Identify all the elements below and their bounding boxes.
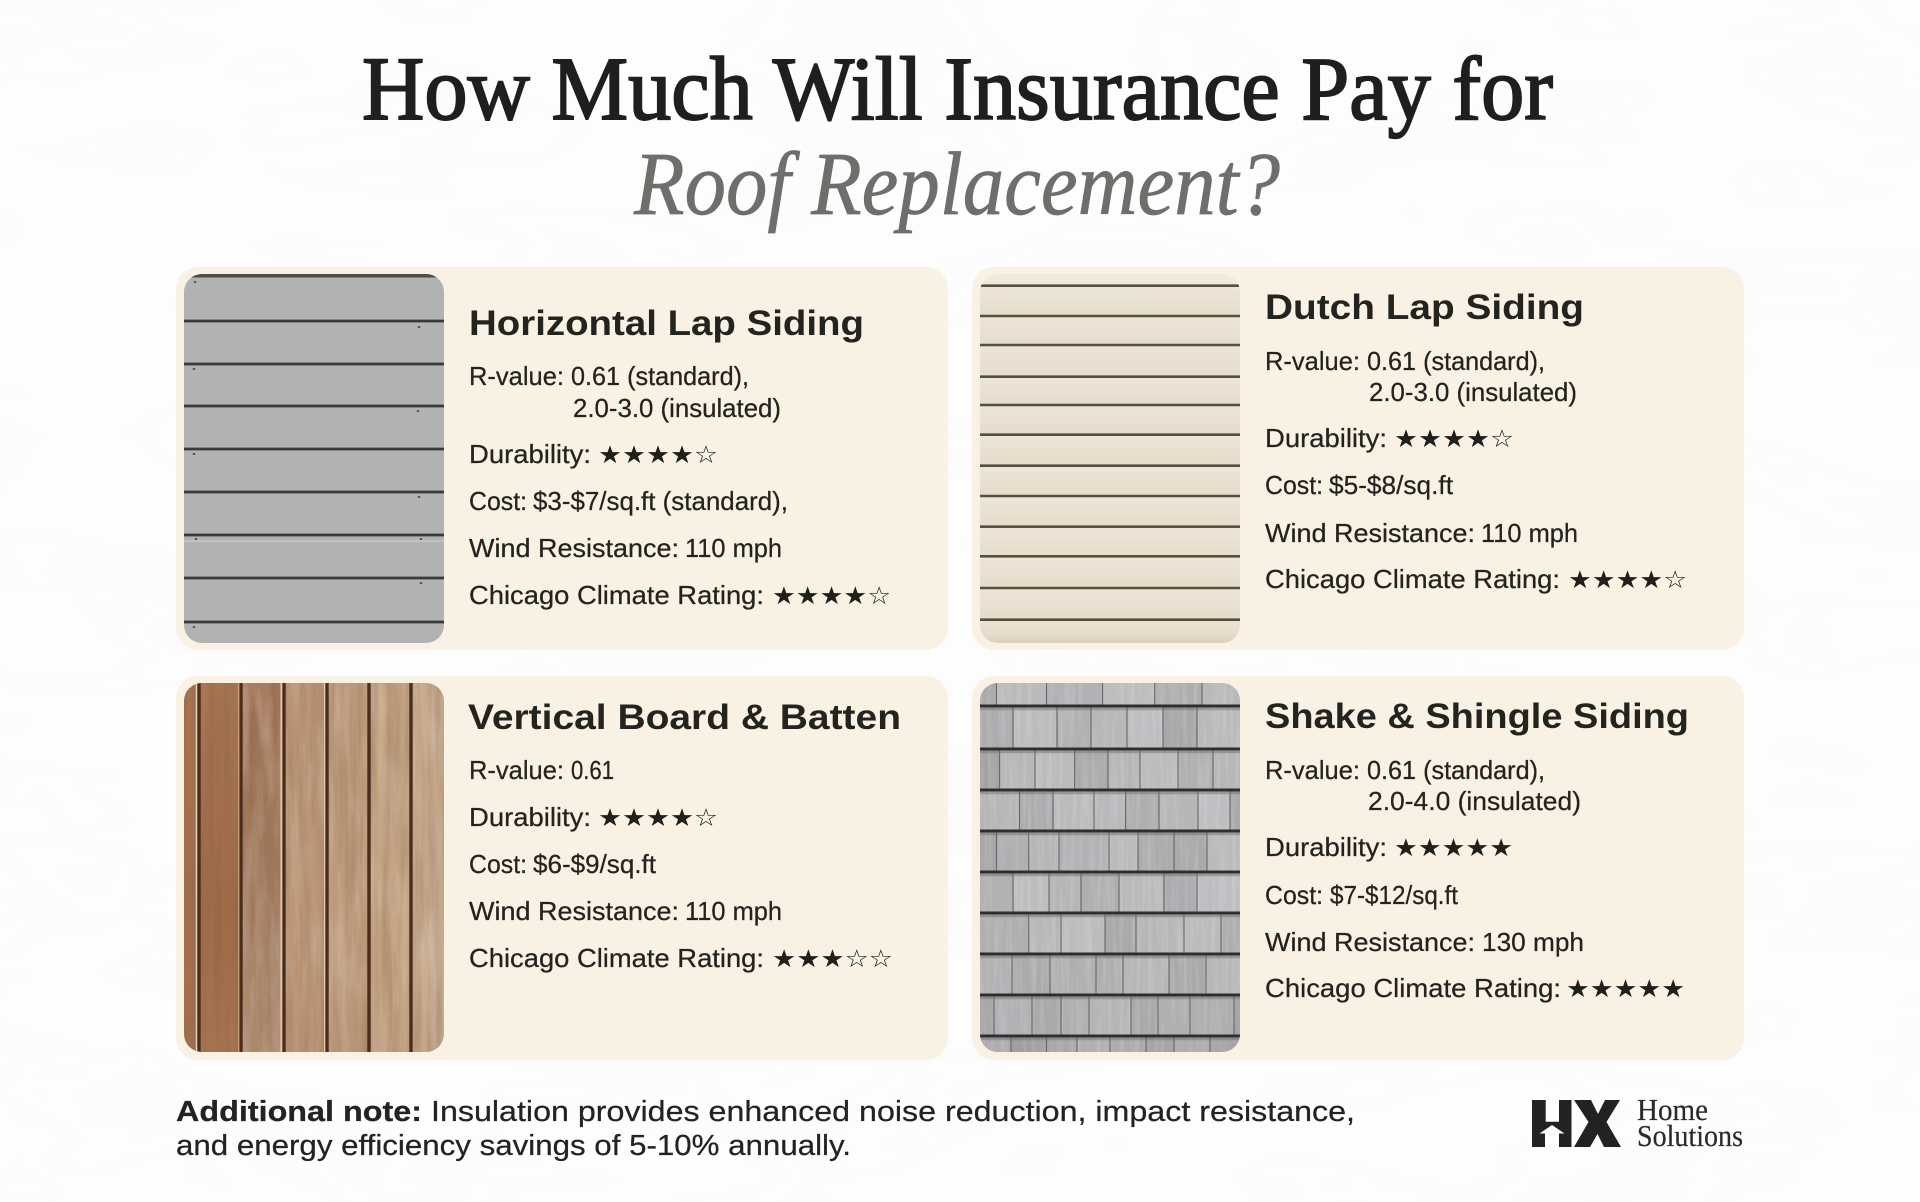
specs: Durability: (1265, 423, 1387, 453)
specs: 110 mph (1481, 518, 1578, 548)
specs: ★★★☆☆ (772, 944, 893, 973)
specs: 130 mph (1482, 927, 1584, 957)
icon: HX mark with house (1532, 1100, 1621, 1147)
specs: ★★★★☆ (598, 440, 718, 469)
specs: 110 mph (685, 896, 782, 926)
photo: wood boards (184, 683, 444, 1052)
photo: cream dutch lap siding (980, 274, 1240, 643)
specs: 0.61 (standard), (1367, 755, 1545, 785)
specs: Wind Resistance: (469, 896, 679, 926)
heading: Vertical Board & Batten (468, 698, 901, 737)
specs: $7-$12/sq.ft (1330, 880, 1459, 910)
specs: $5-$8/sq.ft (1329, 470, 1454, 500)
logo: HX Home Solutions: Solutions (1637, 1118, 1743, 1153)
specs: $3-$7/sq.ft (standard), (533, 486, 788, 516)
heading: Dutch Lap Siding (1265, 288, 1584, 327)
title: How Much Will Insurance Pay for (362, 40, 1553, 139)
specs: R-value: (469, 361, 564, 391)
logo: HX Home Solutions: Home (1637, 1092, 1708, 1127)
panel: shake and shingle siding (972, 676, 1744, 1060)
additional note: and energy efficiency savings of 5-10% annually. (176, 1130, 851, 1162)
specs: 0.61 (571, 755, 614, 785)
specs: R-value: (1265, 346, 1360, 376)
specs: ★★★★☆ (598, 803, 718, 832)
specs: Chicago Climate Rating: (469, 943, 764, 973)
panel: vertical board and batten (176, 676, 948, 1060)
additional note: Additional note: (176, 1096, 422, 1128)
logo: HX Home Solutions (1532, 1092, 1743, 1153)
specs: ★★★★☆ (772, 581, 891, 610)
panel: dutch lap siding (972, 267, 1744, 650)
specs: Durability: (469, 439, 591, 469)
specs (469, 755, 893, 973)
specs: 0.61 (standard), (571, 361, 749, 391)
specs: Cost: (469, 486, 527, 516)
specs: Wind Resistance: (1265, 927, 1475, 957)
specs: $6-$9/sq.ft (533, 849, 657, 879)
specs: Cost: (469, 849, 527, 879)
specs: ★★★★★ (1394, 833, 1513, 862)
specs: Chicago Climate Rating: (1265, 564, 1560, 594)
specs: 2.0-3.0 (insulated) (573, 393, 781, 423)
specs: Chicago Climate Rating: (1265, 973, 1561, 1003)
specs: Cost: (1265, 880, 1323, 910)
specs: Chicago Climate Rating: (469, 580, 764, 610)
specs: R-value: (1265, 755, 1360, 785)
title (362, 40, 1553, 234)
specs: 2.0-4.0 (insulated) (1368, 786, 1581, 816)
specs (469, 361, 891, 610)
title: Roof Replacement? (633, 135, 1280, 234)
specs: Durability: (1265, 832, 1387, 862)
specs: ★★★★☆ (1568, 565, 1687, 594)
specs: R-value: (469, 755, 564, 785)
panel: horizontal lap siding (176, 267, 948, 650)
specs: 2.0-3.0 (insulated) (1369, 377, 1577, 407)
specs: 0.61 (standard), (1367, 346, 1545, 376)
specs (1265, 346, 1687, 594)
additional note (176, 1096, 1355, 1162)
specs: Cost: (1265, 470, 1323, 500)
specs: ★★★★★ (1566, 974, 1685, 1003)
specs: Durability: (469, 802, 591, 832)
photo: grey horizontal siding (184, 274, 444, 643)
specs (1265, 755, 1685, 1003)
specs: Wind Resistance: (469, 533, 679, 563)
additional note: Insulation provides enhanced noise reduction, impact resistance, (431, 1096, 1355, 1128)
specs: 110 mph (685, 533, 782, 563)
heading: Shake & Shingle Siding (1265, 697, 1689, 736)
heading: Horizontal Lap Siding (469, 304, 864, 343)
photo: grey cedar shingles (980, 683, 1240, 1052)
specs: ★★★★☆ (1394, 424, 1514, 453)
specs: Wind Resistance: (1265, 518, 1475, 548)
